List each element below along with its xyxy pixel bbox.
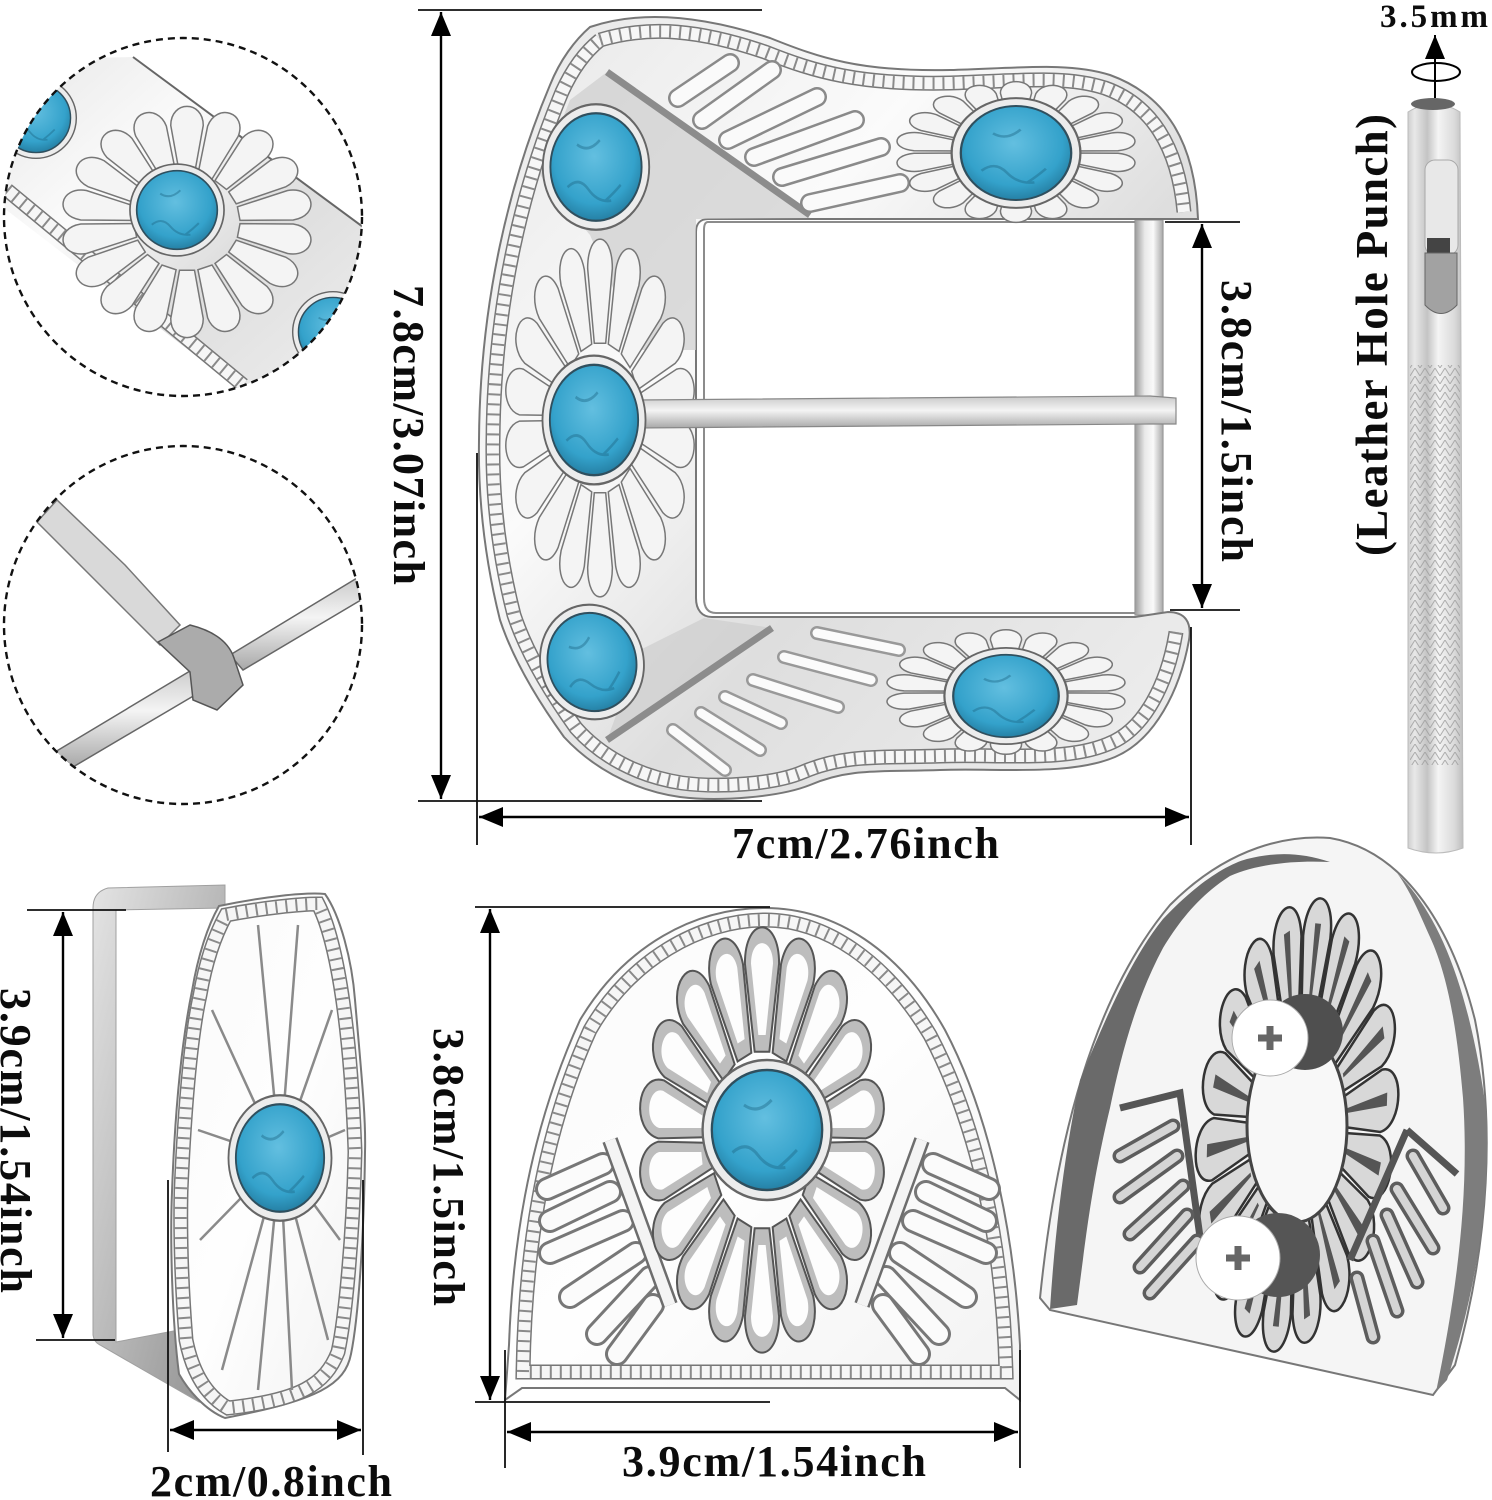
- flower: top right: [895, 82, 1137, 222]
- keeper rope: [181, 904, 355, 1408]
- buckle dimension: height: 7.8cm/3.07inch: [384, 285, 433, 585]
- prong: [636, 396, 1176, 428]
- punch dimension: 3.5mm: 3.5mm: [1380, 0, 1488, 35]
- back tip inner wall: [1050, 854, 1330, 1309]
- back tip right edge: [1397, 873, 1487, 1392]
- flower: bottom right: [885, 630, 1127, 754]
- main buckle: [479, 17, 1198, 799]
- buckle dimension: width: [477, 453, 1191, 868]
- detail circle: turquoise flower close-up: [0, 38, 380, 405]
- tip dimension: width: [505, 1350, 1020, 1486]
- feather panels: [607, 63, 900, 770]
- buckle dimension: inner width: [1165, 222, 1261, 610]
- back feathers: [1120, 1093, 1457, 1337]
- buckle dimension: inner width: 3.8cm/1.5inch: [1212, 280, 1261, 562]
- rope border: [493, 31, 1184, 785]
- tip flower: [637, 927, 887, 1353]
- buckle dimension: width: 7cm/2.76inch: [732, 819, 999, 868]
- belt keeper with loop: [93, 885, 365, 1418]
- punch label: (Leather Hole Punch): [1347, 114, 1397, 556]
- punch slot: [1425, 160, 1458, 314]
- tip rope: [523, 920, 1006, 1372]
- tip stone: [703, 1060, 831, 1200]
- keeper back loop: [93, 885, 225, 1402]
- turquoise stones: [527, 98, 1080, 744]
- keeper stone: [228, 1095, 332, 1221]
- tip dimension: height: [424, 907, 770, 1402]
- leather hole punch tool: [1408, 98, 1463, 853]
- frame shading: [540, 72, 810, 740]
- buckle dimension: height: [384, 10, 762, 801]
- punch knurled grip: [1410, 365, 1460, 765]
- buckle frame: [479, 17, 1198, 799]
- flower: left large: [504, 239, 696, 597]
- tip dimension: width: 3.9cm/1.54inch: [622, 1437, 926, 1486]
- keeper front: [171, 894, 365, 1418]
- belt tip front: [505, 908, 1020, 1400]
- belt tip back with screws: [1040, 838, 1487, 1395]
- tip dimension: height: 3.8cm/1.5inch: [424, 1028, 473, 1306]
- back center oval: [1247, 1030, 1347, 1222]
- keeper dimension: width: [150, 1180, 392, 1500]
- punch dimension: 3.5mm: [1380, 0, 1488, 98]
- tip side feathers: [547, 1140, 989, 1354]
- keeper dimension: height: [0, 910, 126, 1340]
- window inner edge: [704, 222, 1135, 613]
- screw top: [1232, 994, 1343, 1076]
- screw bottom: [1196, 1213, 1320, 1300]
- back flower: [1174, 888, 1420, 1362]
- detail circle: keeper strap on pin: [4, 446, 366, 804]
- buckle pin bar: [1135, 220, 1163, 615]
- keeper rays: [198, 925, 345, 1390]
